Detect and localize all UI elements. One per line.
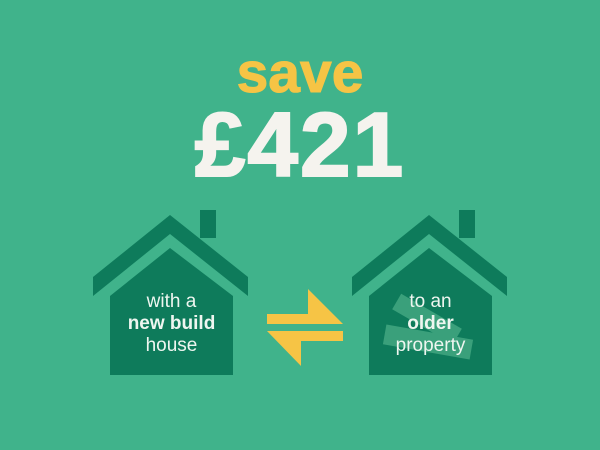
text: new build: [128, 291, 215, 356]
icon: plasters: [383, 294, 473, 359]
text: older property: [396, 291, 466, 356]
text: new build: house: [146, 335, 197, 356]
text: new build: new build: [128, 313, 215, 334]
text: older property: to an: [409, 291, 452, 312]
icon: swap arrows: [267, 289, 343, 366]
icon: older property house: [352, 210, 507, 375]
text: new build: with a: [147, 291, 196, 312]
text: older property: property: [396, 335, 465, 356]
text: older property: older: [407, 313, 454, 334]
title: amount: £421: [195, 95, 405, 196]
icon: new build house: [93, 210, 248, 375]
title: save: save: [237, 41, 363, 105]
